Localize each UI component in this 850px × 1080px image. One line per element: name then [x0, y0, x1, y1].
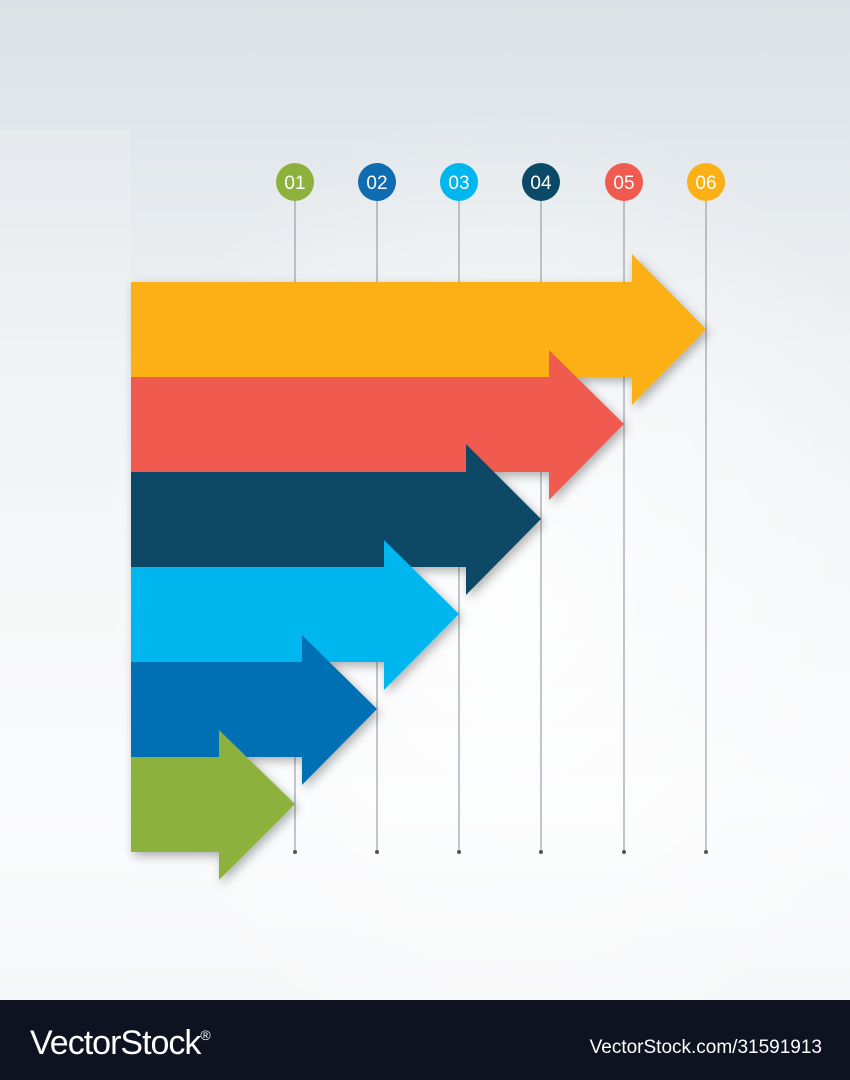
arrow 05 red [131, 350, 624, 500]
step markers: 03 [448, 173, 470, 194]
step markers [276, 163, 725, 201]
step markers: 06 [695, 173, 717, 194]
step markers: 01 [284, 173, 306, 194]
footer [0, 1000, 850, 1080]
arrows [131, 254, 706, 880]
vertical guide lines [295, 200, 706, 852]
arrow 03 cyan [131, 540, 459, 690]
arrow 04 dark [131, 444, 541, 595]
footer: VectorStock.com/31591913 [590, 1037, 822, 1058]
step markers: 05 [613, 173, 635, 194]
arrow 02 blue [131, 635, 377, 785]
step markers: 02 [366, 173, 388, 194]
footer: ® [200, 1027, 211, 1043]
arrow 06 yellow [131, 254, 706, 405]
arrow 01 green [131, 730, 295, 880]
footer: VectorStock [30, 1024, 200, 1062]
step markers: 04 [530, 173, 552, 194]
